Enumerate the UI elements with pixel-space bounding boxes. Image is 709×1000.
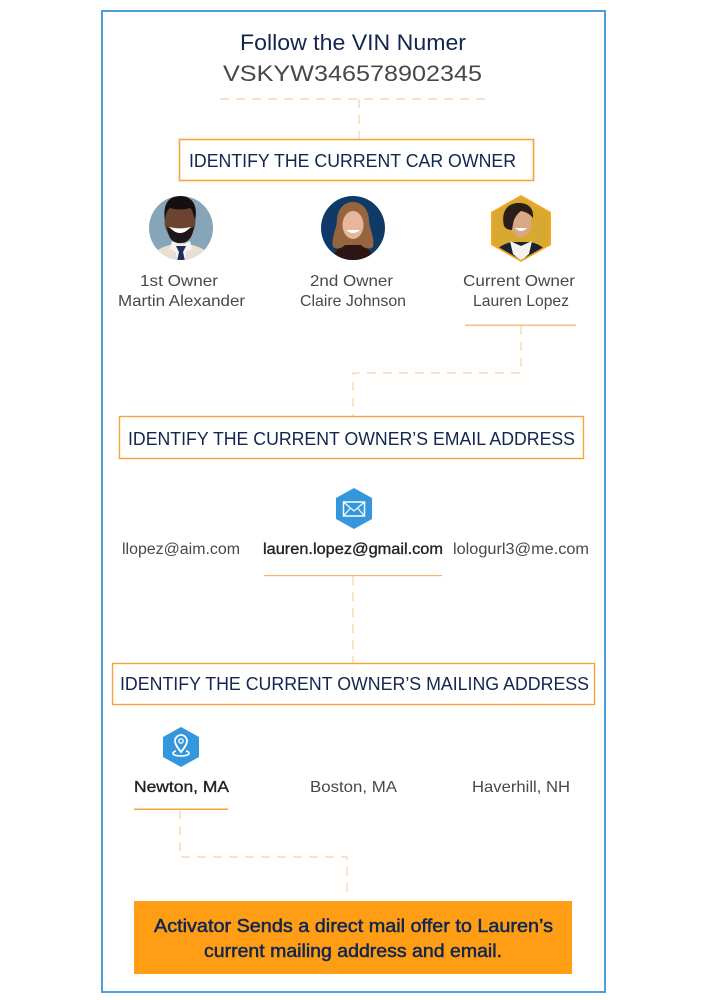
email option: llopez: llopez@aim.com	[122, 541, 240, 558]
icon: portrait of current owner in hexagon	[491, 195, 551, 262]
title: Follow the VIN Numer	[240, 30, 467, 55]
owner 2 label: 2nd Owner	[310, 273, 394, 290]
heading: identify the current owner's email address: IDENTIFY THE CURRENT OWNER’S EMAIL ADDRESS	[128, 428, 575, 449]
icon: location pin in hexagon	[163, 727, 199, 767]
connector: current owner to step 2	[353, 326, 521, 416]
connector: city to result	[180, 810, 347, 899]
current owner name: Lauren Lopez	[473, 293, 569, 310]
owner 1: Martin Alexander	[118, 196, 246, 310]
callout: direct mail offer	[134, 901, 572, 974]
email option: selected: lauren.lopez@gmail.com	[263, 541, 443, 558]
callout: direct mail offer: Activator Sends a direct mail offer to Lauren’s	[154, 916, 553, 936]
icon: portrait of first owner	[149, 196, 213, 262]
selection underline: email	[264, 575, 442, 576]
email options	[122, 541, 589, 558]
owner 2 name: Claire Johnson	[300, 293, 406, 310]
email option: lologurl3: lologurl3@me.com	[453, 541, 589, 558]
heading: identify the current owner's mailing address	[112, 664, 594, 704]
connector: VIN to step 1	[220, 99, 487, 139]
city option: Boston: Boston, MA	[310, 779, 397, 796]
owner 1 label: 1st Owner	[140, 273, 219, 290]
heading: identify the current car owner: IDENTIFY THE CURRENT CAR OWNER	[189, 150, 516, 171]
selection underline	[465, 324, 576, 326]
current owner: Lauren Lopez	[463, 195, 576, 326]
heading: identify the current owner's email address	[120, 416, 584, 458]
outer frame	[102, 11, 605, 992]
owner 1 name: Martin Alexander	[118, 293, 246, 310]
icon: portrait of second owner	[321, 196, 385, 262]
owner 2: Claire Johnson	[300, 196, 406, 310]
city option: selected: Newton, MA	[134, 779, 229, 796]
icon: email envelope in hexagon	[336, 488, 372, 529]
heading: identify the current car owner	[180, 140, 534, 180]
VIN number: VSKYW346578902345	[223, 61, 482, 86]
city options	[134, 779, 570, 796]
callout: direct mail offer: current mailing address and email.	[204, 941, 502, 961]
connector: email to step 3	[352, 576, 354, 663]
heading: identify the current owner's mailing address: IDENTIFY THE CURRENT OWNER’S MAILING ADDRESS	[120, 673, 589, 694]
selection underline: city	[134, 808, 228, 810]
city option: Haverhill: Haverhill, NH	[472, 779, 570, 796]
current owner label: Current Owner	[463, 273, 576, 290]
